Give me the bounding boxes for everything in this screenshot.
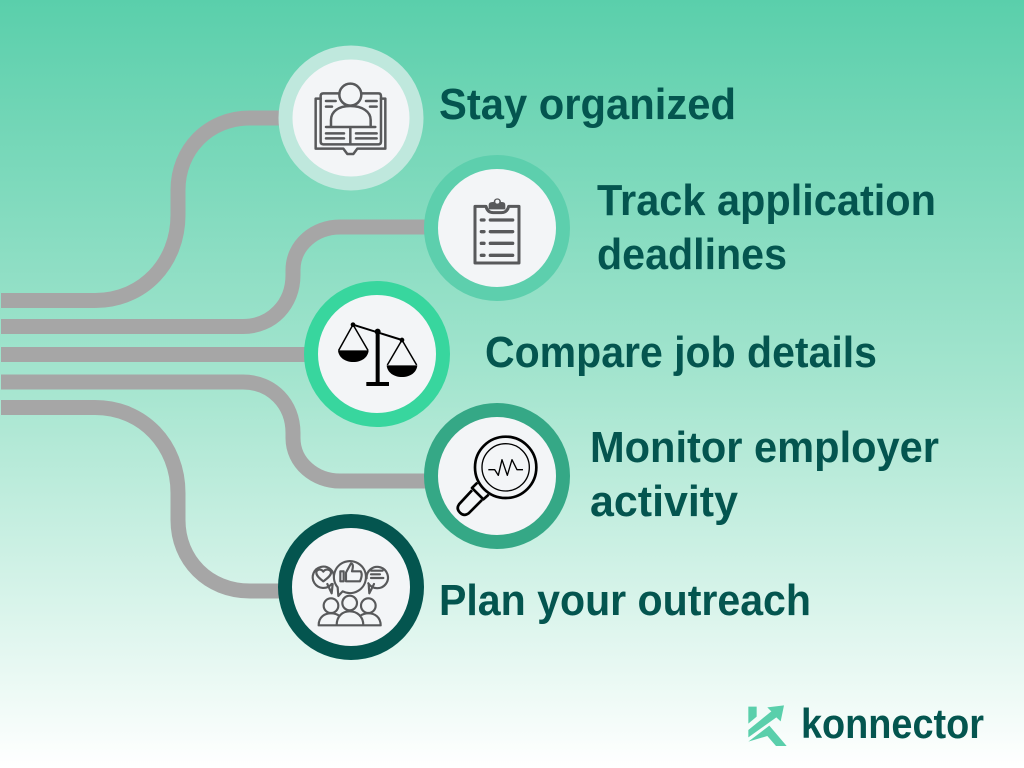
ring 5 — [285, 521, 417, 653]
logo wordmark: konnector — [801, 700, 984, 747]
label: monitor employer activity: Monitor employer — [590, 423, 939, 472]
item 5: plan your outreach — [285, 521, 417, 653]
label: plan your outreach: Plan your outreach — [439, 576, 811, 625]
label: track application deadlines: deadlines — [597, 230, 787, 279]
icon: balance scale — [338, 322, 417, 386]
ring 3 — [311, 288, 443, 420]
icon: clipboard checklist — [475, 198, 519, 263]
icon: magnifying glass with pulse — [458, 437, 536, 515]
connector lines — [1, 118, 430, 591]
label: track application deadlines: Track application — [597, 176, 936, 225]
label: stay organized: Stay organized — [439, 80, 736, 129]
icon: group with speech bubbles — [313, 561, 388, 625]
logo mark — [748, 705, 787, 746]
item 1: stay organized — [286, 52, 416, 184]
ring 4 — [431, 410, 563, 542]
item 3: compare job details — [311, 288, 443, 420]
label: monitor employer activity — [590, 423, 939, 526]
item 2: track application deadlines — [431, 162, 563, 294]
label: track application deadlines — [597, 176, 936, 279]
ring 2 — [431, 162, 563, 294]
label: compare job details: Compare job details — [485, 328, 877, 377]
icon: person on open book — [316, 84, 385, 154]
ring 1 — [286, 52, 416, 184]
konnector logo — [748, 700, 984, 747]
item 4: monitor employer activity — [431, 410, 563, 542]
label: monitor employer activity: activity — [590, 477, 739, 526]
